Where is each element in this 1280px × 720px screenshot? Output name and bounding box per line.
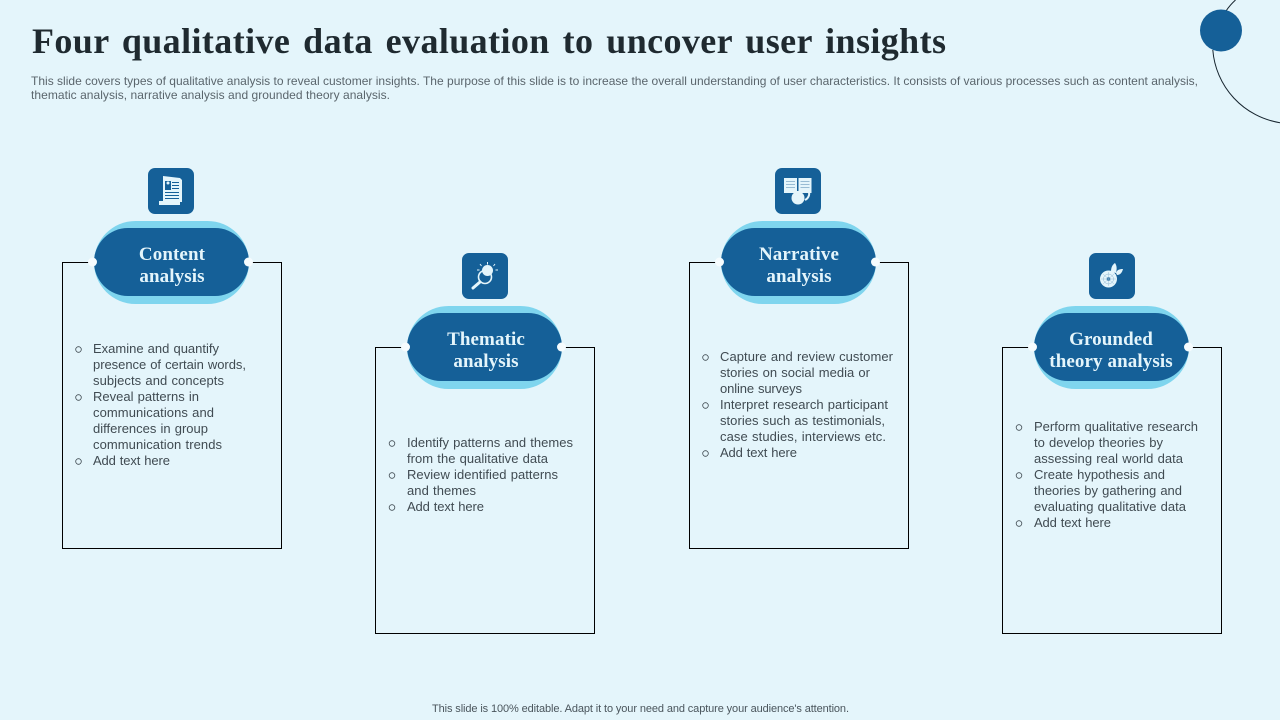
bullet list: differences in group bbox=[93, 421, 208, 436]
panel frame bbox=[1002, 348, 1222, 634]
heading capsule bbox=[1028, 306, 1193, 389]
bullet list: Identify patterns and themes bbox=[407, 435, 574, 450]
heading capsule: Narrative bbox=[759, 244, 839, 265]
heading capsule: analysis bbox=[766, 266, 832, 287]
bullet list: Add text here bbox=[1034, 515, 1111, 530]
title: Four qualitative data evaluation to uncover user insights bbox=[32, 21, 946, 61]
bullet list: Capture and review customer bbox=[720, 349, 894, 364]
heading capsule: Grounded bbox=[1069, 329, 1153, 350]
bullet list: assessing real world data bbox=[1034, 451, 1184, 466]
panel: content analysis bbox=[62, 168, 282, 548]
description: thematic analysis, narrative analysis and grounded theory analysis. bbox=[31, 88, 390, 102]
bullet list: Create hypothesis and bbox=[1034, 467, 1165, 482]
panel frame bbox=[62, 262, 282, 548]
heading capsule: Content bbox=[139, 244, 206, 265]
description bbox=[31, 74, 1198, 102]
heading capsule bbox=[88, 221, 253, 304]
heading capsule: analysis bbox=[453, 351, 519, 372]
bullet list: and themes bbox=[407, 483, 476, 498]
bullet list: to develop theories by bbox=[1034, 435, 1164, 450]
heading capsule: Thematic bbox=[447, 329, 525, 350]
bullet list bbox=[76, 341, 246, 468]
panel: grounded theory analysis bbox=[1002, 253, 1222, 634]
footer note: This slide is 100% editable. Adapt it to your need and capture your audience's attention. bbox=[432, 703, 849, 715]
heading capsule bbox=[401, 306, 566, 389]
bullet list: theories by gathering and bbox=[1034, 483, 1182, 498]
panel frame bbox=[690, 262, 908, 548]
bullet list bbox=[389, 435, 574, 514]
bullet list: Examine and quantify bbox=[93, 341, 220, 356]
icon: document bbox=[148, 168, 194, 214]
bullet list: stories on social media or bbox=[720, 365, 871, 380]
bullet list: evaluating qualitative data bbox=[1034, 499, 1187, 514]
bullet list: Add text here bbox=[93, 453, 170, 468]
bullet list: Perform qualitative research bbox=[1034, 419, 1198, 434]
heading capsule: analysis bbox=[139, 266, 205, 287]
bullet list bbox=[703, 349, 894, 460]
panel: thematic analysis bbox=[376, 253, 594, 634]
bullet list: Interpret research participant bbox=[720, 397, 888, 412]
heading capsule: theory analysis bbox=[1049, 351, 1173, 372]
icon: open book in hand bbox=[775, 168, 821, 214]
bullet list: Review identified patterns bbox=[407, 467, 558, 482]
bullet list: Reveal patterns in bbox=[93, 389, 199, 404]
bullet list bbox=[1016, 419, 1198, 530]
bullet list: communications and bbox=[93, 405, 214, 420]
bullet list: presence of certain words, bbox=[93, 357, 246, 372]
icon: seed with leaves bbox=[1089, 253, 1135, 299]
heading capsule bbox=[715, 221, 880, 304]
panel frame bbox=[376, 348, 594, 634]
panel: narrative analysis bbox=[690, 168, 908, 548]
description: This slide covers types of qualitative analysis to reveal customer insights. The purpose of this slide is to increase the overall understanding of user characteristics. It consists of various processes such as content analysis, bbox=[31, 74, 1198, 88]
icon: lightbulb and magnifier bbox=[462, 253, 508, 299]
bullet list: from the qualitative data bbox=[407, 451, 549, 466]
decorative corner circle bbox=[1200, 0, 1280, 123]
bullet list: online surveys bbox=[720, 381, 802, 396]
bullet list: Add text here bbox=[407, 499, 484, 514]
bullet list: subjects and concepts bbox=[93, 373, 224, 388]
bullet list: communication trends bbox=[93, 437, 222, 452]
bullet list: Add text here bbox=[720, 445, 797, 460]
bullet list: case studies, interviews etc. bbox=[720, 429, 886, 444]
bullet list: stories such as testimonials, bbox=[720, 413, 885, 428]
